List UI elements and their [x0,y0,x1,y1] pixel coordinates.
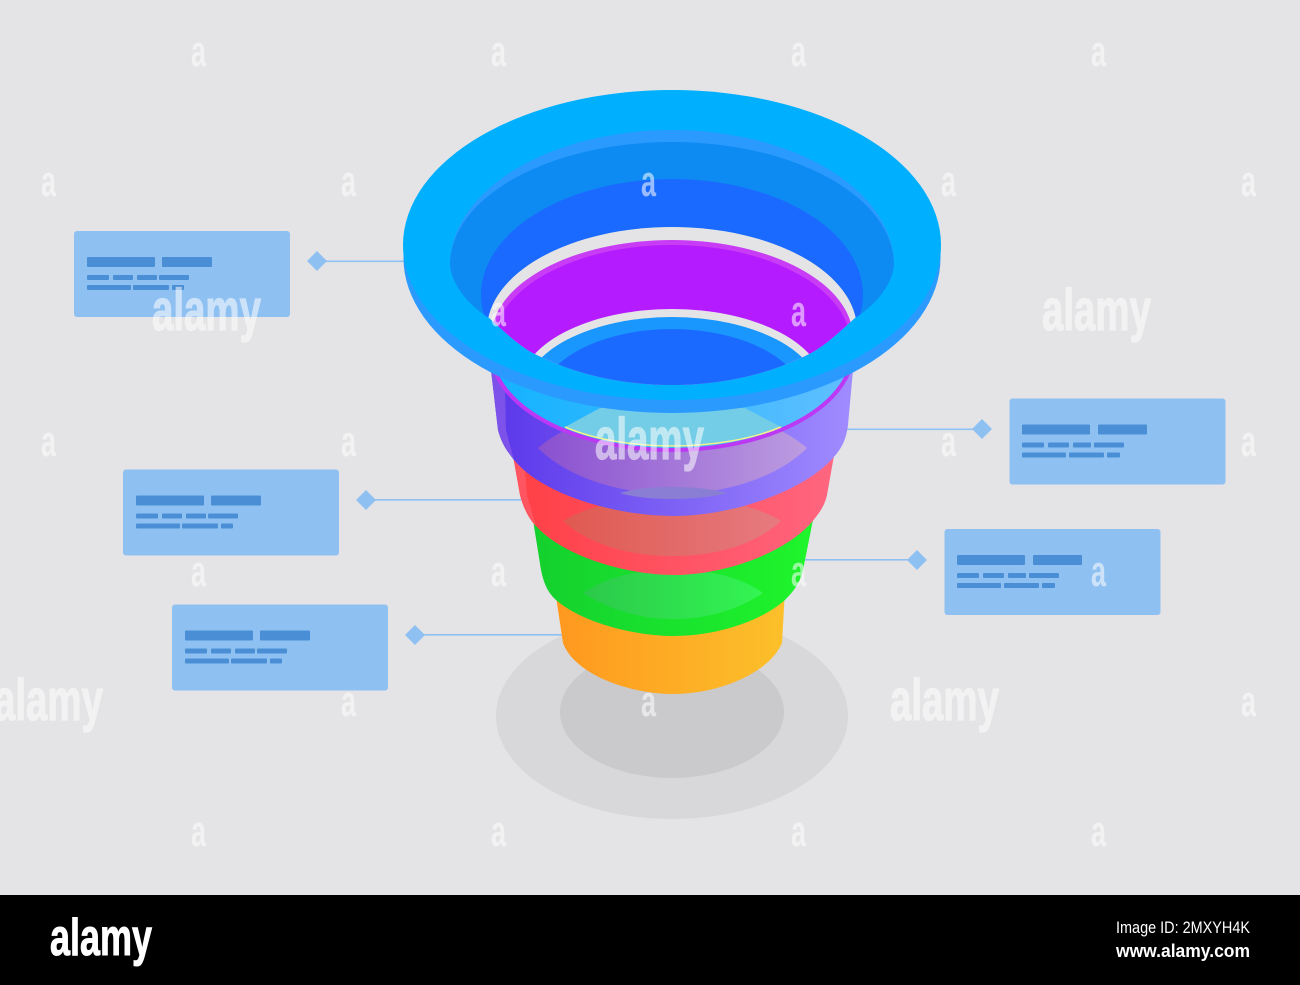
watermark: small repeated marks: a [791,807,806,856]
watermark: small repeated marks: a [191,807,206,856]
funnel tier: purple [491,370,853,516]
website: www.alamy.com [1115,941,1250,961]
watermark: small repeated marks: a [791,287,806,336]
watermark: small repeated marks: a [941,157,956,206]
watermark: small repeated marks: a [941,417,956,466]
watermark: small repeated marks: a [341,677,356,726]
watermark: small repeated marks: a [41,157,56,206]
image id: Image ID: 2MXYH4K [1116,918,1251,937]
connector: bottom left label [405,625,570,645]
watermark: small repeated marks: a [341,417,356,466]
watermark: small repeated marks: a [491,807,506,856]
funnel tier: green [533,520,813,636]
watermark: small repeated marks: a [491,287,506,336]
watermark: small repeated marks: a [1091,27,1106,76]
funnel interior [481,179,863,385]
watermark: small repeated marks: a [41,417,56,466]
watermark: small repeated marks: a [1241,417,1256,466]
translucent window under rim [491,340,853,450]
funnel shadow [496,613,848,819]
watermark: small repeated marks: a [491,547,506,596]
watermark: large alamy marks: alamy [152,278,261,343]
footer bar [0,895,1300,985]
connector: middle left label [356,490,521,510]
footer logo: alamy [50,909,152,967]
watermark: small repeated marks [41,27,1256,856]
label box: lower right [944,529,1160,615]
label box: top left [74,231,290,317]
label box: bottom left [172,604,388,690]
watermark: small repeated marks: a [641,157,656,206]
watermark: small repeated marks: a [1241,157,1256,206]
watermark: small repeated marks: a [791,27,806,76]
watermark: large alamy marks: alamy [1042,278,1151,343]
watermark: small repeated marks: a [1091,807,1106,856]
label box: middle left [123,470,339,556]
connector: top left label [307,251,407,271]
watermark: small repeated marks: a [191,27,206,76]
watermark: large alamy marks: alamy [890,668,999,733]
connector: upper right label [845,419,992,439]
watermark: small repeated marks: a [191,547,206,596]
watermark: small repeated marks: a [341,157,356,206]
funnel rim [403,90,941,413]
watermark: small repeated marks: a [791,547,806,596]
funnel tier: orange [555,590,785,694]
watermark: large alamy marks: alamy [595,407,704,472]
watermark: small repeated marks: a [641,677,656,726]
funnel tier: red [512,450,835,575]
watermark: small repeated marks: a [1241,677,1256,726]
connector: lower right label [800,550,927,570]
watermark: small repeated marks: a [491,27,506,76]
watermark: large alamy marks [0,278,1151,733]
label box: upper right [1010,398,1226,484]
watermark: small repeated marks: a [1091,547,1106,596]
